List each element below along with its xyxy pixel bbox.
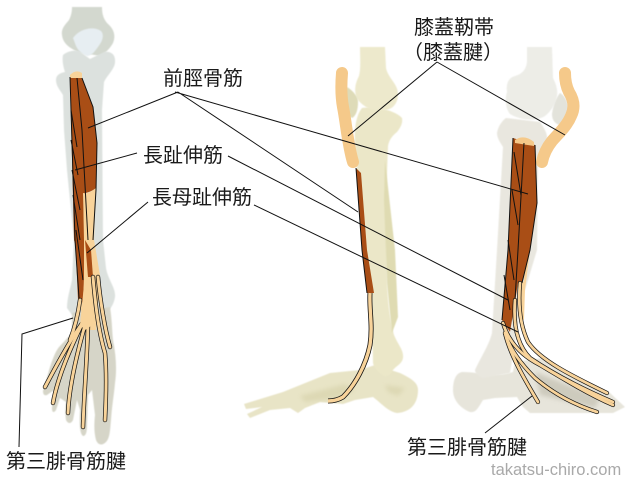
left tibia and fibula: [56, 51, 115, 315]
leader: 前脛骨筋: [88, 92, 528, 212]
left tendon cap: [70, 71, 82, 78]
leader: 第三腓骨筋腱 left: [19, 318, 73, 447]
center tibia: [355, 107, 403, 376]
right figure: lateral view of leg and foot: [453, 47, 625, 413]
right femur: [506, 47, 557, 120]
left muscle lower strip: [73, 190, 84, 303]
left figure: front view of leg and foot: [43, 7, 116, 444]
left tan tendon area: [79, 188, 100, 330]
left femur: [62, 7, 114, 56]
right foot tendons fill: [503, 283, 613, 412]
center figure: medial view of leg and foot: [244, 47, 418, 418]
center fibula: [384, 160, 398, 333]
right muscle: [502, 138, 537, 332]
left tendon hub: [80, 285, 91, 330]
center patella: [344, 87, 358, 118]
leader: 長母趾伸筋: [87, 202, 518, 332]
right tan above ankle: [518, 250, 530, 320]
center tendon outline: [328, 293, 371, 401]
right muscle outlines: [502, 138, 537, 320]
right patella: [552, 93, 568, 125]
label: 長趾伸筋: 長趾伸筋: [143, 144, 223, 167]
right foot and calcaneus bones: [453, 358, 625, 413]
label: 前脛骨筋: 前脛骨筋: [163, 67, 243, 90]
right foot tendons outline: [503, 283, 613, 412]
watermark: site name: takatsu-chiro.com: [491, 461, 621, 479]
right tendon cap: [515, 137, 534, 146]
left tibialis anterior muscle: [70, 77, 97, 276]
label: 第三腓骨筋腱 left: 第三腓骨筋腱: [6, 450, 126, 473]
leader: 第三腓骨筋腱 right: [485, 396, 532, 433]
center femur: [355, 47, 398, 110]
center patellar ligament: [341, 73, 353, 162]
label: 第三腓骨筋腱 right: 第三腓骨筋腱: [407, 436, 527, 459]
left patella: [73, 28, 103, 56]
label: 膝蓋靭帯: 膝蓋靭帯: [414, 16, 494, 39]
label: 膝蓋腱: （膝蓋腱）: [403, 41, 503, 64]
center foot shading: [300, 384, 405, 402]
leader: 長趾伸筋: [75, 153, 508, 300]
label: 長母趾伸筋: 長母趾伸筋: [152, 186, 252, 209]
left foot tendons fill: [45, 277, 110, 427]
left foot bones: [43, 307, 116, 444]
center tendon fill: [328, 293, 371, 401]
leader: 膝蓋靭帯: [348, 62, 565, 136]
right patellar ligament: [542, 73, 573, 162]
center muscle: [356, 168, 374, 293]
right foot shading: [535, 372, 600, 408]
left lower muscle belly: [85, 240, 93, 277]
center foot bones: [244, 365, 418, 418]
left foot tendons outline: [45, 277, 110, 427]
left black outlines: [70, 77, 97, 298]
center muscle outline: [356, 168, 367, 293]
right tibia: [475, 118, 547, 378]
leader lines: [19, 62, 565, 447]
